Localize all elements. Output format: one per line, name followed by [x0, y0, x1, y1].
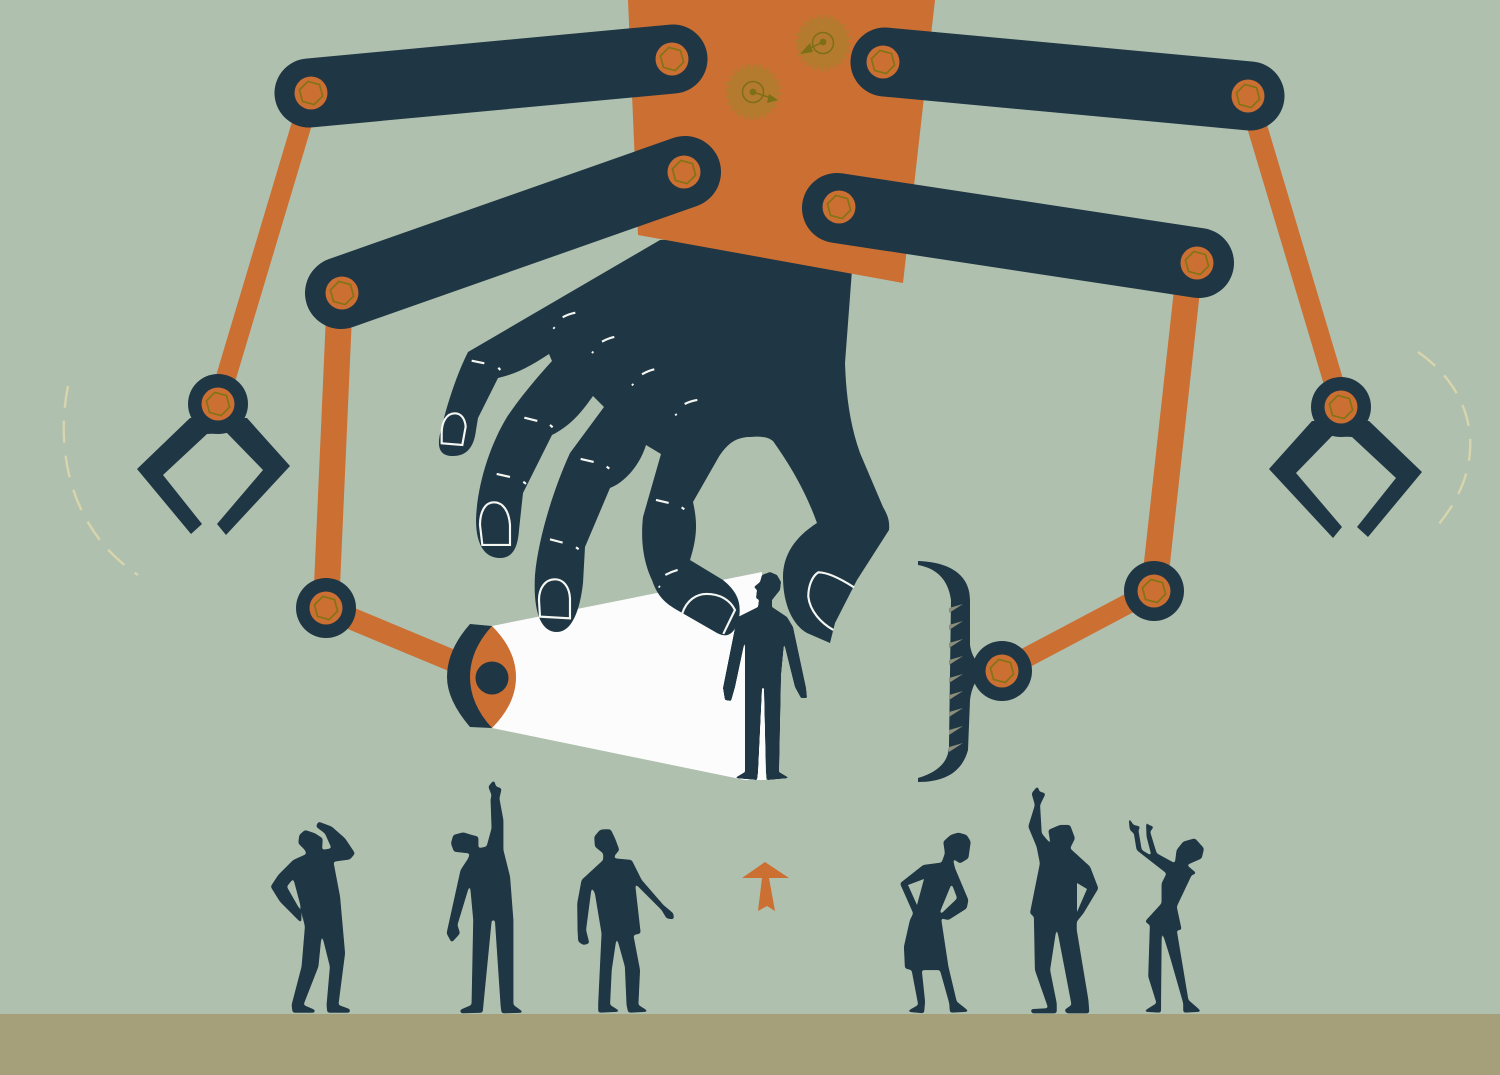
- woman reaching up: [1128, 817, 1204, 1013]
- spotlight eye lamp: [447, 624, 516, 728]
- person looking up with arm out: [577, 829, 674, 1013]
- lower right arm: [837, 208, 1199, 263]
- bracket shape: [918, 561, 985, 782]
- orange linkage rods: [218, 93, 1341, 671]
- hand silhouette: [439, 230, 889, 643]
- orange up arrow: [742, 862, 789, 911]
- ground: [0, 1014, 1500, 1075]
- spotlit man: [723, 572, 807, 780]
- bracket teeth: [949, 604, 963, 752]
- gap: man's right arm: [1077, 883, 1087, 912]
- woman with hands on hips: [900, 833, 971, 1013]
- motion arc: right claw: [1418, 352, 1470, 533]
- joints: [188, 374, 1371, 638]
- giant hand: [439, 230, 889, 643]
- upper right arm: [885, 62, 1250, 96]
- arm bolts: [294, 42, 1264, 310]
- gear: lower: [726, 66, 780, 118]
- light beam: [492, 572, 766, 780]
- lower left arm: [341, 172, 685, 293]
- person pointing up: [447, 780, 524, 1013]
- man pointing up: [1028, 786, 1098, 1013]
- upper left arm: [309, 59, 673, 93]
- right claw: [1269, 421, 1422, 538]
- lamp pupil: [476, 662, 508, 694]
- machine body: [628, 0, 935, 283]
- gear: upper: [796, 16, 850, 70]
- onlookers right group: [900, 786, 1204, 1013]
- lamp lens: [470, 626, 516, 728]
- bracket joint: [972, 641, 1032, 701]
- lamp housing: [447, 624, 492, 728]
- left claw: [137, 418, 290, 535]
- onlookers left group: [271, 780, 674, 1013]
- fingernails and knuckle lines: [442, 313, 854, 634]
- ruler bracket: [918, 561, 1032, 782]
- gap: woman's left arm: [908, 879, 924, 905]
- motion arc: left claw: [64, 386, 138, 575]
- person shading eyes: [271, 822, 355, 1013]
